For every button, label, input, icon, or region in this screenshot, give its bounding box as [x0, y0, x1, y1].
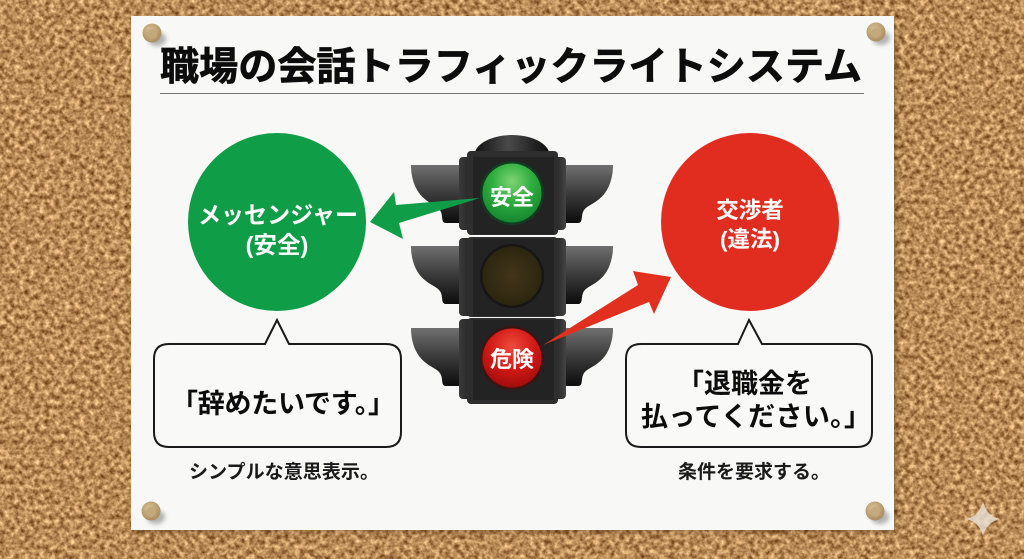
lamp label: safe: 安全: [490, 185, 534, 210]
unlit yellow lamp: [480, 244, 544, 308]
bubble quote: line 1: 「退職金を: [677, 369, 812, 399]
paper sheet: [131, 16, 894, 530]
circle label: negotiator: 交渉者: [716, 198, 784, 223]
bubble quote: line 2: 払ってください。」: [641, 402, 871, 432]
icon: sparkle watermark: [966, 501, 1000, 536]
visors: [411, 165, 613, 386]
dome: [475, 135, 549, 152]
red lamp: [480, 326, 544, 390]
title underline: [160, 93, 864, 94]
arrow: red light to negotiator: [543, 271, 671, 345]
pin: top left: [142, 24, 166, 46]
pin: bottom left: [142, 502, 165, 524]
pin: top right: [866, 22, 890, 45]
circle label: safe: (安全): [246, 232, 308, 258]
caption: right: 条件を要求する。: [678, 460, 830, 483]
circle label: messenger: メッセンジャー: [198, 202, 358, 228]
housing: [459, 157, 566, 230]
arrow: green light to messenger: [370, 192, 480, 239]
pin: bottom right: [866, 502, 889, 524]
green lamp: [480, 161, 544, 225]
speech bubble: right: [626, 320, 872, 447]
lamp label: danger: 危険: [490, 347, 534, 372]
panel: messenger (safe) circle: [188, 133, 366, 311]
traffic light: [411, 135, 613, 404]
circle label: illegal: (違法): [720, 227, 780, 252]
speech bubble: left: [154, 320, 401, 447]
bubble quote: resign: 「辞めたいです。」: [171, 389, 395, 419]
caption: left: シンプルな意思表示。: [189, 461, 379, 483]
panel: negotiator (illegal) circle: [661, 133, 839, 311]
paper shadow: [133, 19, 896, 532]
title: 職場の会話トラフィックライトシステム: [160, 46, 862, 89]
